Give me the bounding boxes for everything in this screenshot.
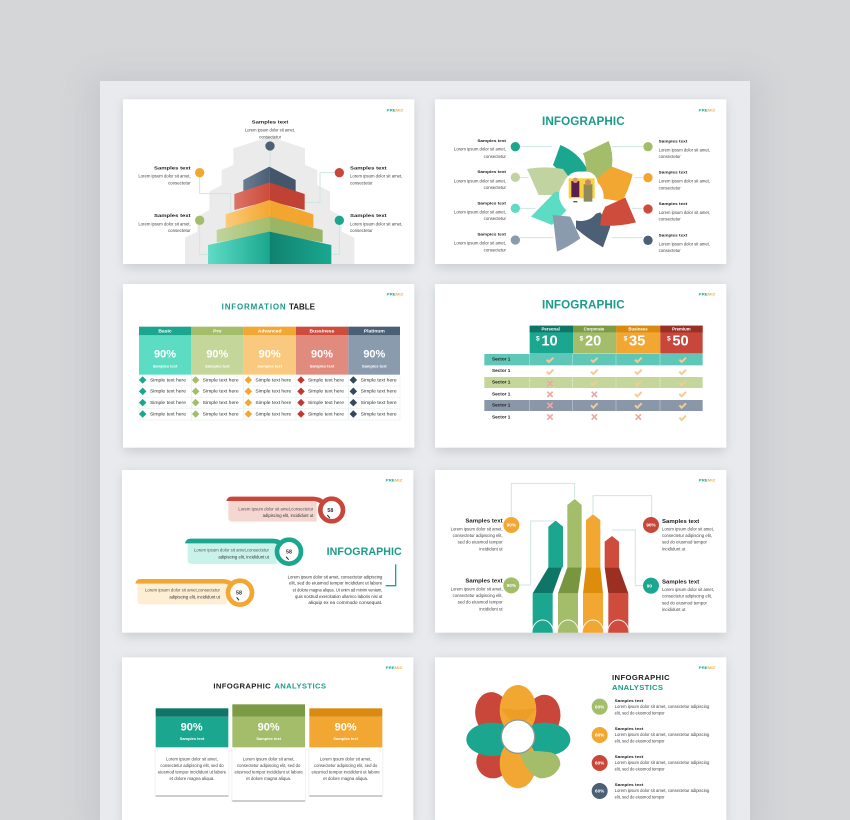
list items: 60%: [595, 789, 605, 794]
list items: 60%: [595, 761, 605, 766]
title: INFOGRAPHIC: [327, 546, 402, 558]
row text: Simple text here: [255, 411, 292, 416]
sector rows: Sector 1: [492, 357, 511, 362]
list items: [592, 698, 710, 800]
table header: [139, 327, 400, 375]
labels: Samples text: [154, 165, 191, 171]
labels: Samples text: [662, 519, 699, 525]
table header: Advanced: [258, 329, 282, 335]
row text: Simple text here: [150, 377, 187, 382]
row text: Simple text here: [203, 411, 239, 416]
row text: Simple text here: [308, 400, 345, 405]
callout: red: 58: [327, 508, 333, 514]
callout: teal: 58: [286, 550, 292, 556]
table header: Samples text: [257, 364, 283, 369]
list items: elit, sed do eiusmod tempor: [615, 739, 665, 744]
title: ANALYSTICS: [612, 683, 663, 692]
slide 7: analytics cards: [122, 657, 413, 820]
row text: Simple text here: [308, 389, 345, 394]
list items: Samples text: [615, 726, 644, 731]
labels: Samples text: [252, 119, 289, 125]
logo: PREMIZ: [386, 479, 403, 483]
table header: 90%: [363, 349, 386, 361]
flower chart: [466, 685, 570, 788]
slide 8: flower analytics: [435, 657, 726, 820]
labels: Lorem ipsum dolor sit amet,: [662, 526, 714, 531]
stepped grey backdrop: [185, 137, 354, 264]
labels: Samples text: [659, 170, 688, 175]
card: teal: Samples text: [180, 736, 205, 741]
labels: consectetur: [659, 217, 681, 222]
table header: Bussiness: [310, 329, 335, 335]
table header: Samples text: [310, 364, 335, 369]
background panel: [88, 76, 762, 820]
sector rows: Sector 1: [492, 391, 511, 396]
percent badges: 90%: [507, 523, 517, 528]
labels: Samples text: [662, 579, 699, 585]
list items: Samples text: [615, 754, 644, 759]
logo: PREMIZ: [699, 666, 716, 670]
card: green: Samples text: [256, 736, 282, 741]
list items: Lorem ipsum dolor sit amet, consectetur adipiscing: [615, 732, 710, 737]
logo: PREMIZ: [386, 666, 403, 670]
slide 4: pricing table: [435, 284, 726, 451]
labels: consectetur: [484, 247, 507, 252]
labels: [451, 518, 714, 612]
pricing headers: Business: [628, 326, 648, 331]
sector rows: [484, 354, 703, 419]
percent badges: 90: [647, 583, 652, 588]
marker dots: [195, 141, 344, 225]
card: orange: [308, 708, 383, 797]
labels: Lorem ipsum dolor sit amet,: [451, 586, 503, 591]
labels: consectetur adipiscing elit,: [662, 533, 712, 538]
callout: red: Lorem ipsum dolor sit amet,consectetur: [238, 506, 314, 511]
card: orange: 90%: [335, 721, 357, 733]
list items: elit, sed do eiusmod tempor: [615, 767, 665, 772]
row text: Simple text here: [150, 411, 187, 416]
table header: 90%: [206, 349, 229, 361]
table header: Samples text: [205, 364, 230, 369]
card: green: [231, 704, 306, 802]
list items: Samples text: [615, 782, 644, 787]
list items: 60%: [595, 733, 605, 738]
arrow: green: [557, 499, 582, 633]
labels: [454, 138, 710, 253]
check and cross marks: [547, 358, 686, 420]
labels: Lorem ipsum dolor sit amet,: [659, 147, 710, 152]
labels: Samples text: [659, 138, 688, 143]
labels: consectetur: [350, 180, 373, 185]
slide 5: ribbon callouts: [122, 470, 413, 636]
row text: Simple text here: [308, 411, 345, 416]
callout: orange: [135, 579, 252, 605]
pricing headers: 35: [629, 334, 645, 350]
labels: incididunt ut: [479, 546, 503, 551]
labels: Lorem ipsum dolor sit amet,: [454, 241, 506, 246]
table header: 90%: [154, 349, 176, 361]
labels: sed do eiusmod tempor: [458, 600, 503, 605]
callout: teal: Lorem ipsum dolor sit amet,consectetur: [194, 547, 270, 552]
labels: Lorem ipsum dolor sit amet,: [454, 178, 506, 183]
labels: incididunt ut: [479, 606, 503, 611]
body text: et dolore magna aliqua. Ut enim ad minim veniam,: [293, 587, 382, 592]
card: green: consectetur adipiscing elit, sed do: [237, 763, 301, 768]
list items: 60%: [595, 704, 605, 709]
card: orange: eiusmod tempor incididunt ut labore: [311, 770, 380, 775]
row text: Simple text here: [150, 400, 187, 405]
table header: Samples text: [362, 364, 387, 369]
sector rows: Sector 1: [492, 414, 511, 419]
card: teal: et dolore magna aliqua.: [169, 776, 214, 781]
labels: Lorem ipsum dolor sit amet,: [138, 221, 191, 226]
sector rows: Sector 1: [492, 368, 511, 373]
title: [213, 681, 326, 690]
labels: Samples text: [659, 201, 688, 206]
row text: Simple text here: [361, 411, 397, 416]
arrow: teal: [532, 521, 563, 633]
title: INFORMATION: [222, 302, 286, 311]
card: orange: Lorem ipsum dolor sit amet,: [320, 756, 371, 761]
callout: teal: adipiscing elit, incididunt ut: [218, 554, 270, 559]
arrow: red: [605, 536, 629, 633]
labels: Samples text: [350, 165, 387, 171]
callout: red: adipiscing elit, incididunt ut: [263, 513, 314, 518]
list items: elit, sed do eiusmod tempor: [615, 795, 665, 800]
title: INFOGRAPHIC: [542, 115, 625, 128]
labels: consectetur: [259, 134, 282, 139]
labels: consectetur: [659, 154, 681, 159]
card: teal: [155, 708, 229, 797]
row text: Simple text here: [203, 377, 239, 382]
card: green: eiusmod tempor incididunt ut labore: [234, 770, 303, 775]
logo: PREMIZ: [699, 479, 716, 483]
body text: aliquip ex ea commodo consequat.: [308, 600, 382, 605]
row text: Simple text here: [255, 389, 292, 394]
card: teal: eiusmod tempor incididunt ut labore: [158, 770, 227, 775]
slide 2: petal infographic: [435, 99, 726, 268]
flower chart: [527, 141, 636, 252]
list items: Samples text: [615, 698, 644, 703]
labels: Lorem ipsum dolor sit amet,: [662, 587, 714, 592]
callout: orange: adipiscing elit, incididunt ut: [169, 594, 221, 599]
labels: consectetur: [484, 216, 507, 221]
percent badges: 90%: [646, 523, 657, 528]
row text: Simple text here: [361, 389, 397, 394]
slide 3: information table: [123, 284, 414, 451]
labels: Lorem ipsum dolor sit amet,: [350, 221, 402, 226]
title: [612, 673, 670, 692]
pricing headers: Personal: [542, 326, 560, 331]
table header: 90%: [311, 349, 333, 361]
pricing headers: $: [536, 336, 540, 343]
logo: PREMIZ: [387, 109, 404, 113]
title: INFOGRAPHIC: [612, 673, 670, 682]
callout: teal: [185, 539, 301, 564]
labels: consectetur adipiscing elit,: [662, 594, 712, 599]
table header: Samples text: [153, 364, 178, 369]
pyramid chart: [208, 167, 331, 264]
slide 1: pyramid: [123, 99, 414, 268]
card: teal: 90%: [181, 721, 203, 733]
body text: quis nostrud exercitation ullamco laboris nisi ut: [295, 594, 383, 599]
labels: Samples text: [465, 518, 503, 524]
list items: Lorem ipsum dolor sit amet, consectetur adipiscing: [615, 788, 710, 793]
labels: Lorem ipsum dolor sit amet,: [659, 210, 710, 215]
card: green: 90%: [258, 721, 280, 733]
connector lines: [520, 147, 643, 238]
table header: Pro: [213, 329, 221, 335]
pricing headers: Premium: [672, 326, 691, 331]
labels: incididunt ut: [662, 607, 686, 612]
connector lines: [511, 483, 652, 586]
labels: Lorem ipsum dolor sit amet,: [659, 179, 710, 184]
percent badges: 90%: [507, 583, 517, 588]
title: INFOGRAPHIC: [213, 681, 271, 690]
body text: Lorem ipsum dolor sit amet, consectetur adipiscing: [288, 574, 383, 579]
labels: consectetur: [350, 228, 373, 233]
labels: Samples text: [350, 213, 387, 219]
labels: Lorem ipsum dolor sit amet,: [454, 147, 506, 152]
list items: Lorem ipsum dolor sit amet, consectetur adipiscing: [615, 704, 710, 709]
card: orange: consectetur adipiscing elit, sed do: [314, 763, 378, 768]
arrow: orange: [582, 514, 604, 633]
labels: Samples text: [477, 169, 507, 174]
row text: Simple text here: [203, 389, 239, 394]
labels: Samples text: [465, 579, 503, 585]
pricing headers: $: [624, 336, 628, 343]
card: teal: consectetur adipiscing elit, sed do: [160, 763, 224, 768]
card: green: et dolore magna aliqua.: [246, 776, 291, 781]
labels: incididunt ut: [662, 546, 686, 551]
labels: consectetur: [168, 180, 191, 185]
pricing headers: 10: [541, 334, 558, 350]
labels: [138, 119, 402, 233]
marker dots: [511, 142, 653, 245]
row text: Simple text here: [361, 400, 397, 405]
labels: Lorem ipsum dolor sit amet,: [245, 128, 295, 133]
row text: Simple text here: [255, 400, 292, 405]
list items: Lorem ipsum dolor sit amet, consectetur adipiscing: [615, 760, 710, 765]
pricing headers: Corporate: [584, 326, 605, 331]
card: green: Lorem ipsum dolor sit amet,: [243, 756, 294, 761]
labels: Lorem ipsum dolor sit amet,: [659, 241, 710, 246]
pricing headers: $: [667, 336, 671, 343]
row diamonds: [139, 376, 357, 418]
labels: sed do eiusmod tempor: [662, 540, 708, 545]
labels: Samples text: [659, 232, 688, 237]
labels: consectetur: [659, 185, 681, 190]
table header: Platinum: [364, 329, 385, 335]
logo: PREMIZ: [387, 293, 404, 297]
row text: Simple text here: [308, 377, 345, 382]
title: INFOGRAPHIC: [542, 299, 625, 312]
callout: orange: 58: [236, 591, 242, 597]
table header: 90%: [259, 349, 281, 361]
pricing headers: $: [580, 336, 584, 343]
centre blob: [559, 171, 604, 221]
row text: Simple text here: [150, 389, 187, 394]
labels: Samples text: [477, 138, 507, 143]
labels: Lorem ipsum dolor sit amet,: [350, 174, 402, 179]
labels: Lorem ipsum dolor sit amet,: [454, 209, 506, 214]
labels: Lorem ipsum dolor sit amet,: [138, 174, 191, 179]
table grid: [139, 375, 400, 420]
connector lines: [200, 151, 339, 254]
slide 3: information table: TABLE: [289, 302, 316, 311]
labels: consectetur: [659, 248, 681, 253]
pricing headers: [530, 326, 703, 354]
labels: consectetur: [484, 154, 507, 159]
pricing headers: 20: [585, 334, 601, 350]
sector rows: Sector 1: [492, 380, 511, 385]
bracket: [386, 564, 396, 586]
callout: orange: Lorem ipsum dolor sit amet,consectetur: [145, 588, 221, 593]
labels: consectetur: [484, 185, 507, 190]
labels: Samples text: [477, 232, 507, 237]
callout: red: [226, 497, 343, 522]
labels: consectetur adipiscing elit,: [453, 533, 503, 538]
labels: consectetur: [168, 228, 191, 233]
slide 6: arrow chart: [435, 470, 726, 636]
labels: sed do eiusmod tempor: [458, 540, 503, 545]
people icon: [569, 178, 595, 202]
row text: Simple text here: [203, 400, 239, 405]
body text: elit, sed do eiusmod tempor incididunt ut labore: [289, 581, 383, 586]
row text: Simple text here: [255, 377, 292, 382]
labels: consectetur adipiscing elit,: [453, 593, 503, 598]
card: orange: Samples text: [333, 736, 359, 741]
body text: [288, 574, 383, 605]
card: orange: et dolore magna aliqua.: [323, 776, 368, 781]
labels: Samples text: [154, 213, 191, 219]
sector rows: Sector 1: [492, 403, 511, 408]
percent badges: [503, 517, 659, 594]
labels: Lorem ipsum dolor sit amet,: [451, 526, 503, 531]
row text: Simple text here: [361, 377, 397, 382]
row text: [150, 377, 397, 416]
logo: PREMIZ: [699, 293, 716, 297]
labels: sed do eiusmod tempor: [662, 600, 708, 605]
title: ANALYSTICS: [274, 681, 326, 690]
card: teal: Lorem ipsum dolor sit amet,: [166, 756, 218, 761]
pricing headers: 50: [672, 334, 689, 350]
table header: Basic: [158, 329, 172, 335]
logo: PREMIZ: [699, 109, 716, 113]
list items: elit, sed do eiusmod tempor: [615, 711, 665, 716]
labels: Samples text: [477, 200, 507, 205]
